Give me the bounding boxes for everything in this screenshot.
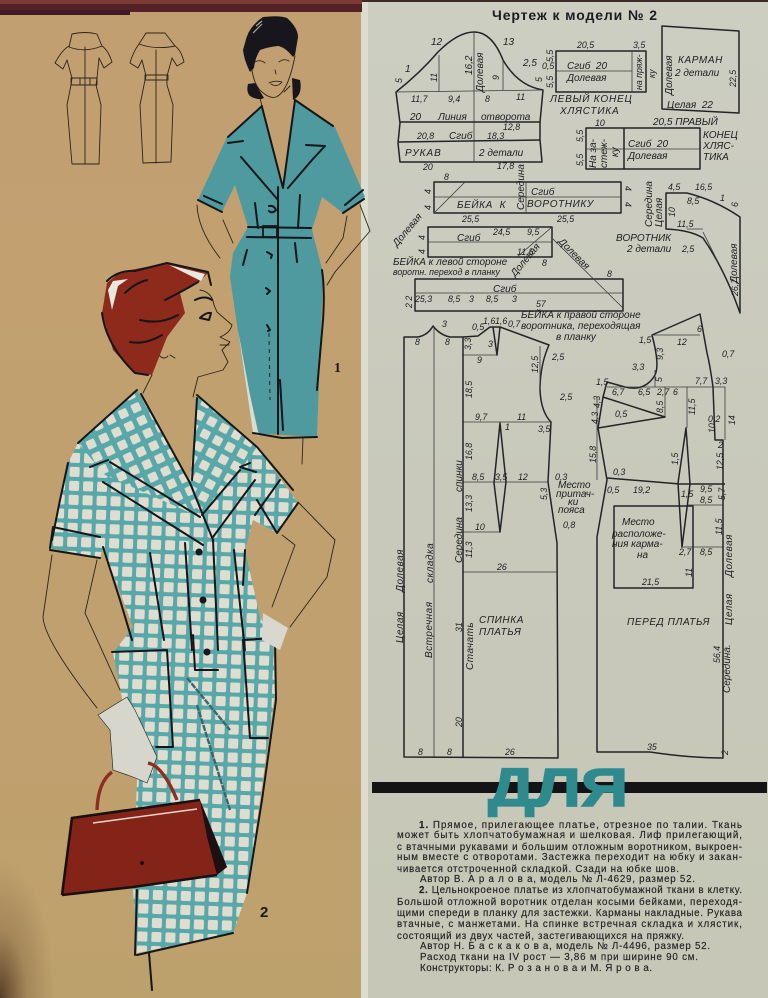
pattern: dress back: Целая bbox=[395, 611, 406, 643]
dress outlines bbox=[78, 390, 293, 540]
pattern: left end of half-belt: 0,5 bbox=[542, 61, 554, 71]
pattern: dress front: 6 bbox=[673, 387, 678, 397]
text block: model descriptions: может быть хлопчатобумажная и шелковая. Лиф прилегающий, bbox=[397, 830, 742, 841]
pattern: collar binding: 4 bbox=[423, 205, 433, 210]
pattern: pocket: КАРМАН bbox=[678, 55, 723, 66]
pattern: left end of half-belt: ку bbox=[647, 69, 657, 78]
bag shading and highlight bbox=[200, 800, 227, 875]
panel: pattern paper background bbox=[362, 0, 768, 998]
pattern: dress front: 6,7 bbox=[612, 387, 625, 397]
pattern: dress front: Долевая bbox=[724, 534, 735, 578]
pattern: binding for right side: 3 bbox=[512, 294, 517, 304]
pattern: binding for left side: 9,5 bbox=[527, 227, 539, 237]
text block: model descriptions: чивается отстроченной складкой. Сзади на юбке шов. bbox=[397, 864, 679, 875]
pattern: sleeve: 13 bbox=[503, 37, 515, 48]
arms bbox=[43, 502, 335, 708]
pattern: dress back: 11,3 bbox=[464, 541, 474, 558]
pattern: dress front: 7,7 bbox=[695, 376, 708, 386]
pattern: dress back: СПИНКА bbox=[479, 615, 524, 626]
pattern: binding for right side: 3 bbox=[469, 294, 474, 304]
pattern: dress front: 0,5 bbox=[615, 409, 627, 419]
pattern: collar binding: 25,5 bbox=[556, 214, 574, 224]
heading bar bbox=[372, 782, 767, 793]
label: number 1: 1 bbox=[334, 361, 341, 376]
pattern: dress back: 8 bbox=[445, 337, 450, 347]
pattern: collar: 2 детали bbox=[626, 244, 672, 255]
face profile bbox=[198, 290, 232, 377]
pattern: dress front: 5 bbox=[654, 377, 664, 382]
pattern: dress back: 8 bbox=[415, 337, 420, 347]
pattern: collar: 2,5 bbox=[681, 244, 694, 254]
pattern: dress front: 0,2 bbox=[708, 414, 720, 424]
pattern: dress front: 11,5 bbox=[687, 398, 697, 415]
pattern: collar: ВОРОТНИК bbox=[616, 233, 672, 244]
buttons bbox=[196, 548, 210, 656]
pattern: dress back: 5,3 bbox=[539, 488, 549, 500]
pattern: dress back: Встречная bbox=[424, 601, 435, 658]
icon: flat sketch of dress back bbox=[130, 33, 184, 163]
pattern: left end of half-belt: Долевая bbox=[566, 73, 607, 84]
pattern: sleeve: 12 bbox=[431, 37, 443, 48]
pattern: left end of half-belt: 20,5 bbox=[576, 40, 594, 50]
arms bbox=[197, 205, 370, 464]
red handbag bbox=[62, 800, 227, 895]
collar left bbox=[78, 390, 200, 517]
pattern: dress front: 8,5 bbox=[655, 401, 665, 413]
pattern: dress back: Стачать bbox=[465, 622, 476, 670]
pattern: right end of half-belt: Долевая bbox=[627, 151, 668, 162]
pattern: dress front: 12 bbox=[677, 337, 687, 347]
left glove bbox=[98, 697, 157, 783]
pattern: right end of half-belt: На за- bbox=[588, 138, 599, 168]
pattern: sleeve: 1 bbox=[405, 64, 411, 75]
pattern: sleeve: Линия bbox=[437, 112, 467, 123]
pattern: binding for right side bbox=[404, 236, 641, 343]
pattern: right end of half-belt: КОНЕЦ bbox=[703, 130, 738, 141]
pattern: collar: 6 bbox=[730, 202, 740, 207]
pattern: dress front: 12,5 bbox=[715, 453, 725, 470]
pattern: dress back: 8,5 bbox=[472, 472, 484, 482]
pattern: binding for left side: Долевая bbox=[508, 241, 543, 280]
pattern: right end of half-belt: 5,5 bbox=[575, 130, 585, 142]
pattern: sleeve: 12,8 bbox=[503, 122, 520, 132]
text block: model descriptions: Автор Н. Б а с к а к о в а, модель № Л-4496, размер 52. bbox=[420, 941, 710, 952]
pattern: binding for right side: 8,5 bbox=[448, 294, 460, 304]
pattern: dress back bbox=[395, 316, 595, 758]
pattern: collar: Долевая bbox=[729, 243, 740, 284]
pattern: left end of half-belt: ЛЕВЫЙ КОНЕЦ bbox=[549, 92, 633, 105]
text block: model descriptions: состоящий из двух частей, застегивающихся на пряжку. bbox=[397, 931, 684, 942]
pattern: sleeve: 20 bbox=[409, 112, 422, 123]
pattern: collar binding: БЕЙКА К bbox=[457, 198, 507, 211]
pattern: dress front: 2,7 bbox=[656, 387, 670, 397]
pattern: collar: 26,7 bbox=[730, 278, 740, 297]
pattern: dress back: 2,5 bbox=[559, 392, 572, 402]
pattern: sleeve: 2,5 bbox=[522, 58, 537, 69]
pattern: binding for left side: БЕЙКА к левой стороне bbox=[393, 255, 508, 268]
pattern: sleeve: 5 bbox=[534, 77, 544, 82]
pattern: sleeve: 2 детали bbox=[478, 148, 524, 159]
pattern: collar: Середина bbox=[644, 181, 655, 227]
pattern: right end of half-belt: 5,5 bbox=[575, 154, 585, 166]
text block: model descriptions: щими спереди в планку для застежки. Карманы накладные. Рукава bbox=[397, 908, 743, 919]
pattern: binding for right side: 8,5 bbox=[486, 294, 498, 304]
pattern: dress front: 0,3 bbox=[613, 467, 625, 477]
pattern: sleeve: 11 bbox=[516, 92, 525, 102]
pattern: dress front: 6 bbox=[697, 324, 702, 334]
pattern: dress front: на bbox=[637, 550, 649, 561]
dress outlines bbox=[228, 100, 333, 200]
pattern: dress front: Целая bbox=[724, 593, 735, 625]
pattern: dress front: 2 bbox=[717, 440, 723, 450]
pattern: dress back: 3,5 bbox=[538, 424, 550, 434]
pattern: collar binding: 4 bbox=[623, 202, 633, 207]
text block: model descriptions: Большой отложной воротник отделан косыми бейками, переходя- bbox=[397, 897, 742, 908]
hair highlight bbox=[253, 21, 262, 33]
text block: model descriptions: Конструкторы: К. Р о з а н о в а и М. Я р о в а. bbox=[420, 963, 652, 974]
text block: model descriptions: Расход ткани на IV рост — 3,86 м при ширине 90 см. bbox=[420, 952, 698, 963]
top page edge bbox=[0, 0, 768, 15]
pattern: dress front: 11,5 bbox=[714, 518, 724, 535]
pattern: left end of half-belt: Сгиб 20 bbox=[567, 60, 607, 72]
pattern: dress front: 21,5 bbox=[641, 577, 659, 587]
pattern: dress front: 2,7 bbox=[678, 547, 692, 557]
pattern: dress back: 12 bbox=[518, 472, 528, 482]
pattern: pocket bbox=[662, 26, 739, 113]
pattern: sleeve: 8 bbox=[485, 94, 490, 104]
pattern: binding for left side: воротн. переход в планку bbox=[393, 267, 500, 277]
pattern: dress back: 2,5 bbox=[551, 352, 564, 362]
neck bbox=[143, 375, 198, 397]
pattern: sleeve: Долевая bbox=[475, 52, 486, 93]
pattern: right end of half-belt bbox=[575, 115, 738, 169]
skirt pleat stitching bbox=[187, 678, 230, 810]
bag handles bbox=[97, 763, 177, 810]
pattern: dress front: 3,3 bbox=[632, 362, 644, 372]
pattern: dress front: 10 bbox=[707, 423, 717, 433]
pattern: collar: Целая bbox=[654, 197, 665, 227]
pattern: dress back: 13,3 bbox=[464, 495, 474, 512]
pattern: pocket: 2 детали bbox=[674, 68, 720, 79]
pattern: binding for left side: 8 bbox=[542, 258, 547, 268]
pattern: collar: 10 bbox=[667, 207, 677, 217]
pattern: right end of half-belt: 20,5 ПРАВЫЙ bbox=[652, 115, 719, 128]
pattern: binding for right side: БЕЙКА к правой стороне bbox=[521, 308, 641, 321]
pattern: binding for right side: в планку bbox=[556, 332, 597, 343]
pattern: dress front: 3,3 bbox=[715, 376, 727, 386]
text block: model descriptions: 2. Цельнокроеное платье из хлопчатобумажной ткани в клетку. bbox=[419, 885, 742, 896]
right glove bbox=[262, 613, 288, 650]
pattern: sleeve: 5 bbox=[394, 78, 404, 83]
pattern: sleeve: 9 bbox=[491, 75, 501, 80]
pattern: dress back: 1 bbox=[505, 422, 510, 432]
page gutter bbox=[361, 0, 368, 998]
pattern: dress back: 1,6 bbox=[495, 316, 507, 326]
pattern: collar binding: Долевая bbox=[390, 211, 425, 250]
text block: model descriptions: втачные, с манжетами. На спинке встречная складка и хлястик, bbox=[397, 919, 742, 930]
pattern: sleeve: Сгиб bbox=[449, 130, 473, 142]
pattern: sleeve: 20 bbox=[422, 162, 433, 172]
collar right bbox=[192, 395, 257, 515]
face details bbox=[255, 60, 290, 92]
pattern: dress back: спинки bbox=[454, 460, 465, 492]
checked dress body bbox=[50, 390, 298, 953]
pattern: dress back: 26 bbox=[504, 747, 515, 757]
pattern: left end of half-belt bbox=[542, 40, 657, 117]
pattern: binding for left side: 11,5 bbox=[517, 247, 534, 257]
heading word: ДЛЯ bbox=[488, 758, 628, 818]
pattern: collar binding: 8 bbox=[444, 172, 449, 182]
pattern: dress front: 11 bbox=[684, 568, 694, 577]
pattern: dress front: 4,3 bbox=[592, 396, 602, 408]
pattern: left end of half-belt: 3,5 bbox=[633, 40, 645, 50]
pattern: dress front: 4,3 bbox=[590, 412, 600, 424]
pattern: collar: 8,5 bbox=[687, 196, 699, 206]
pattern: dress front: 1,5 bbox=[670, 453, 680, 465]
pattern: binding for right side: 57 bbox=[536, 299, 547, 309]
pattern: dress front: 0,7 bbox=[722, 349, 735, 359]
pattern: dress back: 0,8 bbox=[563, 520, 575, 530]
pattern: dress front: 6,5 bbox=[638, 387, 650, 397]
pattern: dress front: 14 bbox=[727, 415, 737, 425]
pattern: left end of half-belt: на пряж- bbox=[634, 54, 644, 90]
hair bbox=[243, 16, 301, 100]
pattern: dress back: 18,5 bbox=[464, 381, 474, 398]
pattern: collar: 16,5 bbox=[695, 182, 712, 192]
panel: illustration background bbox=[0, 0, 362, 998]
pattern: binding for left side: 4 bbox=[417, 235, 427, 240]
pattern: collar binding bbox=[390, 164, 633, 250]
pattern: dress back: 3 bbox=[488, 339, 493, 349]
pattern: left end of half-belt: ХЛЯСТИКА bbox=[559, 106, 619, 117]
pattern: dress front: Середина. bbox=[722, 644, 733, 693]
teal dress bbox=[198, 100, 365, 437]
pattern: binding for right side: 8 bbox=[607, 269, 612, 279]
pattern: collar binding: 4 bbox=[423, 189, 433, 194]
pattern: dress front: 9,3 bbox=[655, 348, 665, 360]
pattern: dress back: ки bbox=[568, 497, 579, 508]
text block: model descriptions: ным вместе с отворотами. Застежка переходит на юбку и закан- bbox=[397, 852, 742, 863]
pockets bbox=[112, 635, 273, 747]
pattern: binding for left side: 24,5 bbox=[492, 227, 510, 237]
pattern: dress front: 35 bbox=[647, 742, 657, 752]
pattern: right end of half-belt: ку bbox=[610, 146, 621, 157]
pattern: dress front: 1,5 bbox=[681, 489, 693, 499]
pattern: right end of half-belt: ХЛЯС- bbox=[702, 141, 735, 152]
pattern: dress back: 9,7 bbox=[475, 412, 488, 422]
pattern: binding for right side: 25,3 bbox=[414, 294, 432, 304]
pattern: binding for left side bbox=[393, 227, 552, 280]
pattern: pocket: 22,5 bbox=[728, 70, 738, 88]
pattern: collar binding: Сгиб bbox=[531, 186, 555, 198]
pattern: dress back: пояса bbox=[558, 505, 585, 516]
pattern: dress front bbox=[588, 314, 737, 758]
figure 2: woman in checked dress with red bag bbox=[43, 263, 335, 990]
pattern: left end of half-belt: 5,5 bbox=[545, 50, 555, 62]
pattern: dress back: 0,7 bbox=[508, 319, 521, 329]
pattern: dress front: 1,5 bbox=[639, 335, 651, 345]
pattern: dress front: 5,7 bbox=[717, 487, 727, 500]
pattern: dress front: 19,2 bbox=[633, 485, 650, 495]
pattern: dress front: ния карма- bbox=[612, 539, 663, 550]
pattern: collar binding: 25,5 bbox=[461, 214, 479, 224]
text block: model descriptions: 1. Прямое, прилегающее платье, отрезное по талии. Ткань bbox=[419, 820, 742, 831]
pattern: collar binding: ВОРОТНИКУ bbox=[527, 199, 595, 210]
pattern: sleeve bbox=[394, 32, 544, 172]
pattern: sleeve: 16,2 bbox=[464, 55, 475, 75]
icon: flat sketch of dress front bbox=[55, 32, 112, 164]
pattern: dress back: 8 bbox=[418, 747, 423, 757]
pattern: dress front: ПЕРЕД ПЛАТЬЯ bbox=[627, 617, 710, 628]
pattern: dress back: Место bbox=[558, 480, 591, 491]
pattern: collar: 4,5 bbox=[668, 182, 680, 192]
pattern: dress back: 10 bbox=[475, 522, 485, 532]
pattern: dress back: 3 bbox=[442, 319, 447, 329]
pattern: collar bbox=[616, 181, 740, 313]
title: Чертеж к модели № 2 bbox=[492, 7, 657, 23]
pattern: sleeve: РУКАВ bbox=[405, 148, 442, 159]
pattern: dress front: расположе- bbox=[611, 529, 666, 540]
pattern: dress back: Долевая bbox=[395, 549, 406, 593]
pattern: dress front: 0,5 bbox=[607, 485, 619, 495]
pattern: dress back: 12,5 bbox=[530, 356, 540, 373]
pattern: dress back: 20 bbox=[454, 717, 464, 728]
pattern: sleeve: 11,7 bbox=[411, 94, 429, 104]
pattern: binding for left side: 4 bbox=[417, 249, 427, 254]
pattern: dress front: 8,5 bbox=[700, 495, 712, 505]
label: number 2: 2 bbox=[260, 904, 268, 921]
hair lines and highlight bbox=[102, 263, 211, 375]
pattern: binding for right side: 2 2 bbox=[404, 296, 414, 309]
pattern: dress back: 16,8 bbox=[464, 443, 474, 460]
pattern: dress back: ПЛАТЬЯ bbox=[479, 627, 521, 638]
pattern: dress front: 56,4 bbox=[712, 646, 722, 663]
text block: model descriptions: Автор В. А р а л о в а, модель № Л-4629, размер 52. bbox=[420, 874, 695, 885]
pattern: dress back: 11 bbox=[517, 412, 526, 422]
pattern: pocket: Целая 22 bbox=[667, 100, 713, 111]
pattern: sleeve: 11 bbox=[429, 73, 439, 82]
red hair bbox=[102, 263, 208, 375]
pattern: dress front: 2 bbox=[720, 750, 730, 756]
pattern: right end of half-belt: ТИКА bbox=[703, 152, 729, 163]
text block: model descriptions: с втачными рукавами и большим отложным воротником, выкроен- bbox=[397, 842, 742, 853]
pattern: binding for right side: воротника, переходящая bbox=[521, 321, 641, 332]
pattern: binding for right side: Долевая bbox=[555, 236, 592, 273]
pattern: binding for right side: Сгиб bbox=[493, 283, 517, 295]
pattern: pocket: Долевая bbox=[664, 55, 675, 96]
pattern: right end of half-belt: 10 bbox=[595, 118, 605, 128]
pattern: sleeve: 17,8 bbox=[497, 161, 514, 171]
pattern: dress back: складка bbox=[425, 543, 436, 583]
text block: model descriptions bbox=[397, 820, 743, 974]
pattern: dress back: 8 bbox=[447, 747, 452, 757]
pattern: collar binding: Середина bbox=[516, 164, 527, 210]
pattern: dress front: 8,5 bbox=[700, 547, 712, 557]
pattern: binding for left side: Сгиб bbox=[457, 232, 481, 244]
pattern: right end of half-belt: Сгиб 20 bbox=[628, 138, 668, 150]
pattern: dress front: 9,5 bbox=[700, 484, 712, 494]
pattern: sleeve: 20,8 bbox=[416, 131, 434, 141]
pattern: dress back: 0,5 bbox=[472, 322, 484, 332]
pattern: dress back: 3,3 bbox=[463, 338, 473, 350]
pattern: dress back: притач- bbox=[556, 489, 595, 500]
pattern: collar: 1 bbox=[720, 193, 725, 203]
pattern: dress back: Середина bbox=[454, 517, 465, 563]
pattern: dress front: Место bbox=[622, 517, 655, 528]
head outline bbox=[252, 56, 295, 106]
pattern: dress back: 3,5 bbox=[495, 472, 507, 482]
pattern: right end of half-belt: стеж- bbox=[599, 138, 610, 168]
pattern: dress back: 9 bbox=[477, 355, 482, 365]
pattern: sleeve: 9,4 bbox=[448, 94, 460, 104]
pattern: sleeve: 18,3 bbox=[487, 131, 504, 141]
pattern: dress front: 1,5 bbox=[596, 377, 608, 387]
pattern: left end of half-belt: 5,5 bbox=[545, 76, 555, 88]
pattern: sleeve: отворота bbox=[481, 112, 531, 123]
pattern: dress back: 0,3 bbox=[555, 472, 567, 482]
pattern: collar: 11,5 bbox=[677, 219, 694, 229]
pattern: dress front: 15,8 bbox=[588, 446, 598, 463]
figure 1: woman in teal dress bbox=[197, 16, 370, 464]
pattern: dress back: 1,6 bbox=[483, 316, 495, 326]
highlight at skirt side bbox=[238, 330, 259, 436]
pattern: dress back: 31 bbox=[454, 622, 464, 632]
bottom-left shadow bbox=[0, 860, 55, 998]
pattern: collar binding: 4 bbox=[623, 186, 633, 191]
pattern: dress back: 26 bbox=[496, 562, 507, 572]
